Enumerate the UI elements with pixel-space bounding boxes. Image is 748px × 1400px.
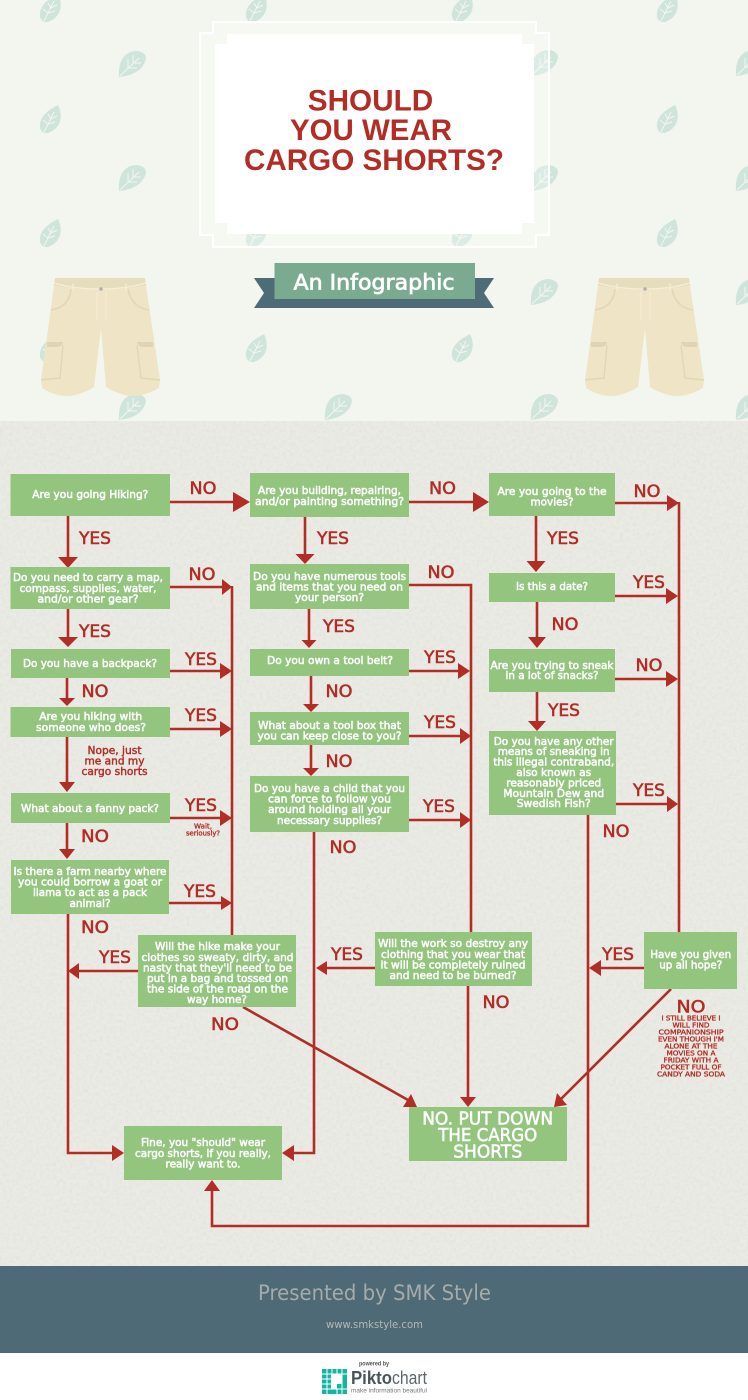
arrow: child yes: YES [422, 797, 455, 817]
arrow: gear yes [58, 609, 111, 647]
box: carry gear [10, 567, 170, 609]
arrow: farm yes: YES [183, 882, 216, 902]
piktochart logo: make information beautiful [351, 1388, 428, 1394]
footer band: www.smkstyle.com [326, 1318, 423, 1331]
arrow: tool belt no: NO [326, 682, 352, 702]
arrow: contraband yes [616, 781, 678, 812]
arrow: farm no: NO [81, 918, 109, 938]
arrow: movies no [615, 482, 679, 511]
arrow: fanny pack no: NO [81, 827, 109, 847]
arrow: tool belt no [303, 676, 352, 712]
box: fanny pack: What about a fanny pack? [21, 802, 159, 815]
box: backpack [11, 649, 170, 678]
box: child: around holding all your [268, 803, 391, 816]
arrow: child no: NO [330, 838, 356, 858]
left collector line [231, 586, 233, 935]
arrow: date no [528, 602, 578, 648]
box: sweaty hike: the side of the road on the [147, 982, 288, 996]
box: farm [11, 860, 169, 914]
arrow: gear no [170, 565, 232, 595]
box: numerous tools [250, 564, 409, 609]
ribbon: An Infographic: An Infographic [294, 270, 454, 294]
title: CARGO SHORTS? [244, 144, 504, 177]
arrow: sweaty no [211, 1007, 417, 1107]
box: contraband: also known as [516, 766, 591, 779]
box: movies [489, 473, 615, 516]
box: going hiking [10, 474, 170, 516]
box: result fine: cargo shorts, if you really, [135, 1147, 271, 1160]
box: building: Are you building, repairing, [258, 484, 401, 497]
box: movies: movies? [530, 496, 574, 509]
box: farm: you could borrow a goat or [18, 876, 162, 889]
arrow: movies yes: YES [546, 529, 579, 549]
arrow: tool box yes: YES [423, 713, 456, 733]
arrow: movies yes [526, 516, 579, 572]
piktochart logo: powered by [359, 1360, 389, 1368]
arrow: hope no [554, 989, 671, 1107]
arrow: gear yes: YES [78, 622, 111, 642]
box: child: can force to follow you [268, 793, 391, 806]
arrow: fanny pack yes: seriously? [186, 830, 220, 838]
arrow: someone no with note: me and my [84, 754, 145, 768]
box: result no: NO. PUT DOWN [422, 1110, 553, 1130]
box: carry gear: and/or other gear? [38, 592, 139, 606]
arrow: date no: NO [552, 615, 578, 635]
box: backpack: Do you have a backpack? [23, 657, 157, 670]
box: given up hope: up all hope? [659, 958, 722, 972]
note: still believe: I STILL BELIEVE I [662, 1014, 720, 1022]
box: contraband: Do you have any other [494, 735, 614, 748]
arrow: backpack yes: YES [184, 650, 217, 670]
box: carry gear: compass, supplies, water, [20, 582, 156, 595]
box: burned clothing: clothing that you wear that [381, 948, 526, 961]
box: carry gear: Do you need to carry a map, [13, 571, 163, 584]
arrow: snacks no: NO [636, 656, 662, 676]
leaf pattern [40, 0, 748, 420]
box: burned clothing [375, 932, 532, 986]
arrow: someone no with note: Nope, just [88, 744, 142, 757]
arrow: backpack no [59, 678, 108, 706]
arrow: building no [409, 479, 489, 512]
arrow: someone no with note [59, 737, 148, 792]
arrow: tool belt yes: YES [423, 648, 456, 668]
arrow: movies no: NO [634, 482, 660, 502]
arrow: building yes [296, 517, 349, 564]
arrow: tool box no [303, 745, 352, 776]
note: still believe [657, 998, 725, 1078]
note: still believe: POCKET FULL OF [660, 1064, 722, 1072]
piktochart logo: chart [392, 1368, 427, 1388]
arrow: farm yes [169, 882, 232, 910]
note: still believe: CANDY AND SODA [657, 1070, 725, 1078]
box: tool box [250, 712, 409, 745]
arrow: child no [282, 832, 356, 1161]
box: tool belt: Do you own a tool belt? [267, 654, 393, 667]
arrow: burned yes [316, 945, 375, 975]
arrow: hiking no [170, 479, 250, 512]
box: tool box: What about a tool box that [258, 719, 402, 732]
box: snacks: Are you trying to sneak [490, 659, 614, 672]
arrow: sweaty yes: YES [98, 948, 131, 968]
arrow: child yes [409, 797, 471, 828]
box: tool box: you can keep close to you? [258, 730, 402, 743]
arrow: tool box no: NO [326, 752, 352, 772]
box: numerous tools: your person? [295, 591, 364, 604]
box: burned clothing: and need to be burned? [390, 969, 517, 982]
arrow: backpack no: NO [82, 682, 108, 702]
box: contraband: means of sneaking in [498, 745, 610, 758]
box: hiking with someone [10, 707, 170, 737]
arrow: backpack yes [170, 650, 232, 679]
box: sweaty hike: nasty that they'll need to be [143, 962, 292, 974]
box: farm: Is there a farm nearby where [14, 865, 167, 878]
arrow: hiking yes: YES [78, 529, 111, 549]
note: still believe: COMPANIONSHIP [658, 1028, 724, 1036]
box: result no [409, 1107, 567, 1162]
arrow: fanny pack no [59, 823, 109, 859]
footer band [0, 1266, 748, 1353]
arrow: sweaty no: NO [211, 1015, 239, 1035]
arrow: tool box yes [409, 713, 471, 744]
box: contraband [489, 731, 616, 815]
title [244, 84, 504, 177]
title panel [200, 22, 549, 247]
box: contraband: this illegal contraband, [493, 756, 614, 769]
arrow: burned yes: YES [330, 945, 363, 965]
box: child: necessary supplies? [277, 814, 382, 827]
white footer strip [0, 1353, 748, 1400]
arrow: snacks no [615, 656, 678, 687]
arrow: date yes [615, 573, 678, 604]
box: hiking with someone: Are you hiking with [39, 710, 142, 723]
note: still believe: MOVIES ON A [666, 1050, 716, 1058]
box: building [250, 473, 409, 517]
top background [0, 0, 748, 421]
footer band: Presented by SMK Style [258, 1281, 491, 1305]
arrow: fanny pack yes: Wait, [194, 822, 212, 830]
box: farm: animal? [70, 897, 111, 910]
box: given up hope [644, 932, 737, 989]
box: sweaty hike [138, 935, 296, 1007]
shorts illustration left [41, 278, 160, 396]
arrow: snacks yes [528, 692, 580, 731]
arrow: snacks yes: YES [547, 701, 580, 721]
box: burned clothing: it will be completely ruined [380, 958, 526, 972]
box: sweaty hike: Will the hike make your [155, 940, 280, 953]
box: result fine [124, 1126, 282, 1180]
arrow: tools no collector: NO [428, 563, 454, 583]
arrow: hope yes [589, 945, 644, 976]
arrow: contraband no [204, 815, 630, 1226]
note: still believe: FRIDAY WITH A [664, 1056, 719, 1064]
box: contraband: Mountain Dew and [503, 787, 604, 800]
box: date: Is this a date? [516, 580, 588, 593]
piktochart logo: Pikto [351, 1368, 392, 1388]
arrow: someone yes [170, 706, 232, 737]
box: building: and/or painting something? [255, 495, 404, 508]
arrow: tools yes [302, 609, 355, 648]
arrow: tools yes: YES [322, 617, 355, 637]
arrow: building no: NO [429, 479, 456, 499]
arrow: date yes: YES [632, 573, 665, 593]
box: going hiking: Are you going Hiking? [32, 488, 148, 501]
box: hiking with someone: someone who does? [36, 721, 146, 734]
arrow: hiking no: NO [190, 479, 216, 499]
box: farm: llama to act as a pack [33, 886, 148, 899]
arrow: hiking yes [58, 516, 111, 568]
box: sweaty hike: put in a bag and tossed on [147, 972, 288, 985]
flowchart paper background [0, 421, 748, 1266]
note: still believe: EVEN THOUGH I'M [658, 1036, 724, 1044]
box: fanny pack [11, 793, 170, 823]
box: snacks [489, 649, 615, 692]
box: result no: SHORTS [453, 1142, 522, 1162]
arrow: hope yes: YES [601, 945, 634, 965]
title: YOU WEAR [290, 114, 452, 147]
box: result no: THE CARGO [437, 1126, 537, 1146]
box: contraband: Swedish Fish? [517, 797, 591, 810]
box: sweaty hike: way home? [187, 993, 247, 1006]
title: SHOULD [308, 84, 433, 118]
shorts illustration right [585, 278, 704, 396]
arrow: burned no [460, 986, 510, 1107]
arrow: contraband no: NO [602, 822, 630, 842]
box: result fine: really want to. [166, 1158, 240, 1170]
box: child [250, 776, 409, 832]
ribbon: An Infographic [254, 263, 494, 308]
box: movies: Are you going to the [498, 485, 607, 498]
arrow: gear no: NO [188, 565, 216, 585]
box: contraband: reasonably priced [506, 776, 601, 790]
box: child: Do you have a child that you [254, 782, 405, 795]
box: tool belt [250, 649, 409, 676]
box: sweaty hike: clothes so sweaty, dirty, and [142, 951, 294, 964]
note: still believe: ALONE AT THE [664, 1042, 718, 1050]
piktochart logo [322, 1360, 428, 1394]
box: numerous tools: and items that you need on [256, 580, 403, 594]
box: snacks: in a lot of snacks? [506, 669, 599, 682]
arrow: building yes: YES [316, 529, 349, 549]
right collector line [678, 502, 680, 932]
box: date [489, 573, 615, 602]
note: still believe: NO [676, 998, 706, 1018]
arrow: fanny pack yes [170, 796, 232, 838]
arrow: burned no: NO [482, 993, 510, 1013]
note: still believe: WILL FIND [672, 1022, 710, 1030]
box: given up hope: Have you given [650, 948, 731, 961]
arrow: tool belt yes [409, 648, 470, 679]
arrow: tools no collector [409, 563, 471, 932]
box: numerous tools: Do you have numerous tools [253, 570, 406, 583]
arrow: someone no with note: cargo shorts [82, 765, 148, 778]
arrow: sweaty yes [68, 948, 138, 979]
arrow: someone yes: YES [184, 706, 217, 726]
arrow: contraband yes: YES [632, 781, 665, 801]
arrow: farm no [68, 914, 124, 1161]
arrow: fanny pack yes: YES [184, 796, 217, 816]
box: burned clothing: Will the work so destroy any [378, 937, 528, 950]
box: result fine: Fine, you "should" wear [141, 1136, 265, 1149]
